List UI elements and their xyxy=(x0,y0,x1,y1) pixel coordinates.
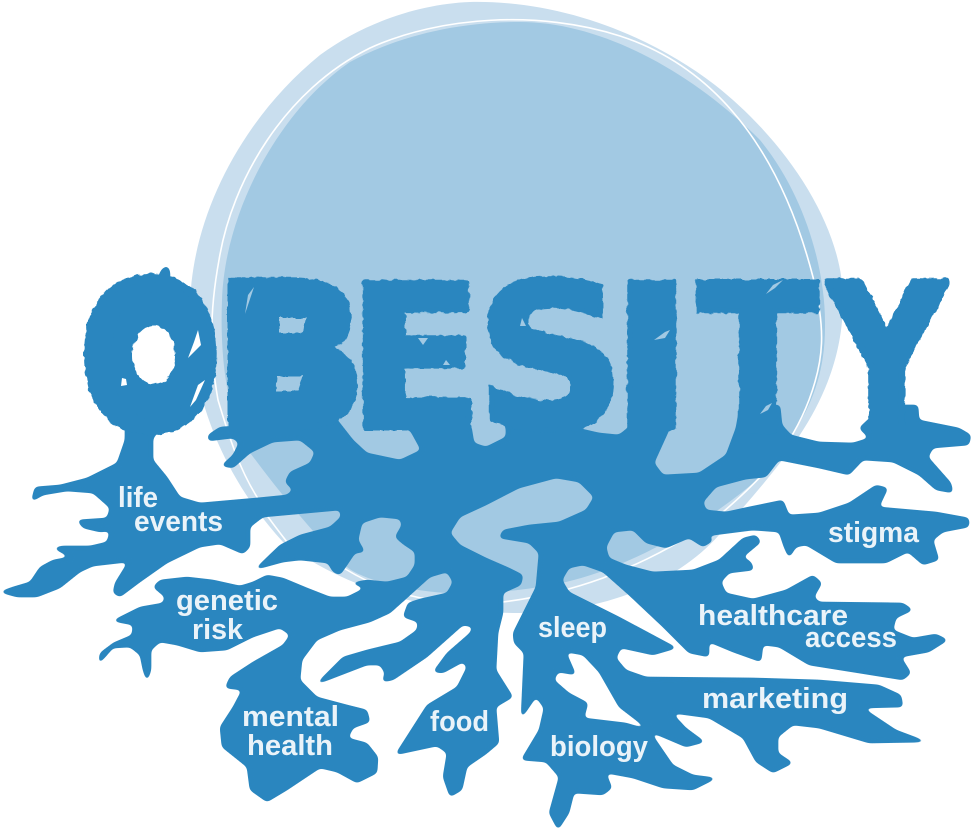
title: OBESITY: E xyxy=(347,243,484,476)
label: genetic risk xyxy=(176,585,278,646)
background: pale outer circle xyxy=(190,2,843,613)
title: OBESITY: B xyxy=(211,241,370,475)
title: OBESITY: Y xyxy=(826,242,947,475)
background: thin white ring line xyxy=(212,20,822,603)
label: sleep: sleep xyxy=(538,612,607,644)
label: life events xyxy=(118,482,223,538)
label: mental health: mental xyxy=(242,701,339,733)
background: darker inner circle xyxy=(222,22,825,593)
O top stalk xyxy=(155,267,170,285)
label: mental health: health xyxy=(247,730,333,762)
label: genetic risk: genetic xyxy=(176,585,278,617)
label: life events: life xyxy=(118,482,158,514)
title: OBESITY: S xyxy=(475,243,626,475)
label: healthcare access: access xyxy=(805,622,897,654)
title: OBESITY xyxy=(79,241,947,480)
label: mental health xyxy=(242,701,339,762)
label: biology: biology xyxy=(550,731,648,763)
title: OBESITY: O xyxy=(79,241,222,476)
label: marketing: marketing xyxy=(702,683,848,715)
letter scratches xyxy=(121,280,909,414)
label: genetic risk: risk xyxy=(192,614,244,646)
label: healthcare access xyxy=(698,600,897,654)
label: healthcare access: healthcare xyxy=(698,600,848,632)
label: food: food xyxy=(430,706,489,738)
label: life events: events xyxy=(134,506,223,538)
title: OBESITY: T xyxy=(697,242,818,480)
label: stigma: stigma xyxy=(828,517,920,549)
title: OBESITY: I xyxy=(609,242,695,475)
root network silhouette xyxy=(0,405,971,830)
